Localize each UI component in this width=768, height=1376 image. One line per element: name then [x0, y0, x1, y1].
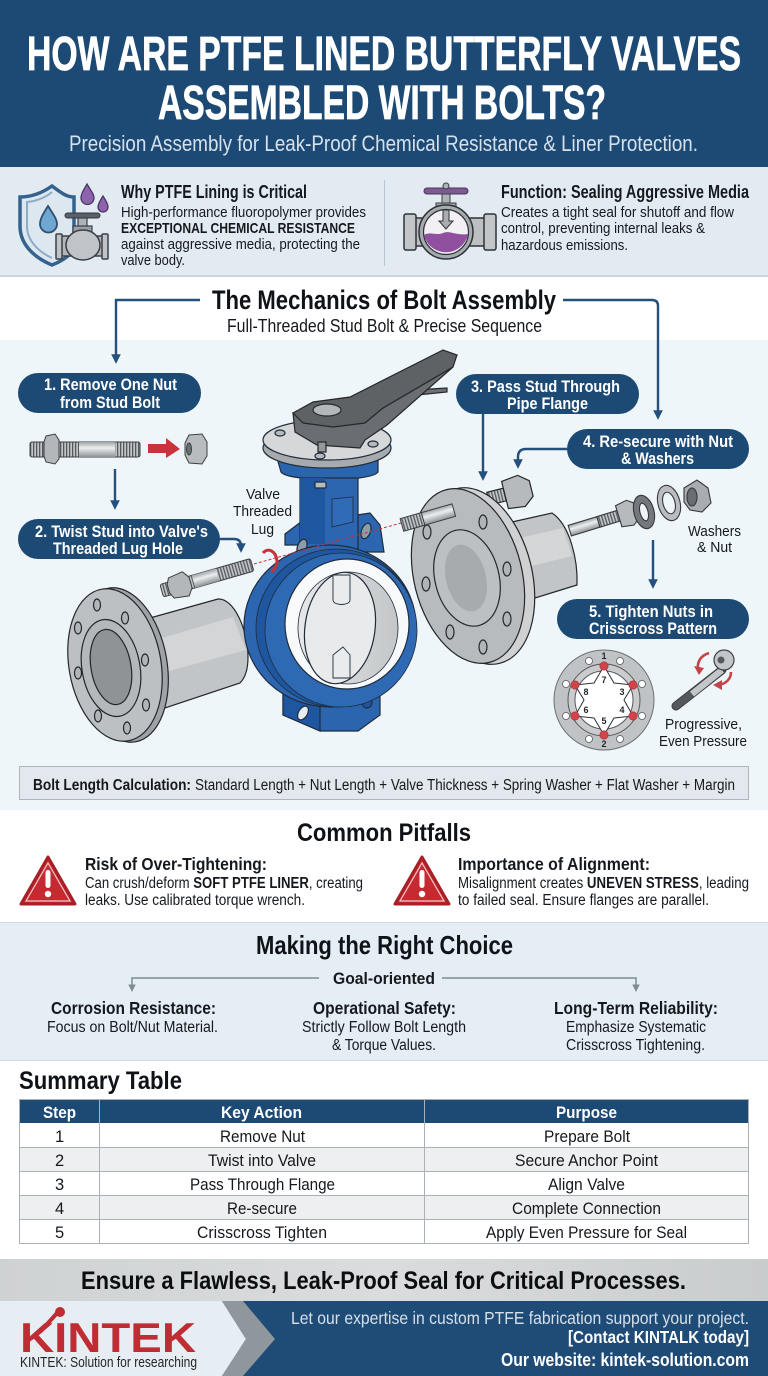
- step 1 pill: 1. Remove One Nut: [44, 376, 177, 394]
- table row 3: [55, 1176, 625, 1194]
- label: valve threaded lug: Lug: [251, 521, 274, 538]
- step 3 pill: 3. Pass Stud Through: [471, 378, 620, 396]
- arrow: step 4 to bolt: [518, 449, 567, 465]
- diagram: crisscross tightening pattern: 3: [619, 687, 625, 697]
- icon: warning right: [395, 857, 449, 904]
- arrow: step 3 to flange: [482, 414, 484, 477]
- label: goal-oriented with arrows: [132, 969, 636, 989]
- text block: why PTFE lining is critical: High-performance fluoropolymer provides: [121, 204, 366, 221]
- table header: Key Action: [221, 1104, 302, 1122]
- heading: common pitfalls: Common Pitfalls: [297, 819, 471, 847]
- illustration: stud through flange: [400, 504, 456, 531]
- illustration: top flange: [263, 420, 391, 468]
- table row 3: Align Valve: [548, 1176, 625, 1194]
- label: valve threaded lug: Threaded: [233, 503, 292, 520]
- table row 5: 5: [55, 1224, 64, 1242]
- arrow: step 1 to step 2: [114, 469, 116, 506]
- column: corrosion resistance: Corrosion Resistance:: [51, 998, 216, 1018]
- text block: function sealing aggressive media: [501, 182, 750, 254]
- illustration: butterfly valve: [244, 350, 457, 731]
- illustration: bolt behind flange: [485, 473, 535, 515]
- text block: why PTFE lining is critical: against aggressive media, protecting the: [121, 236, 360, 253]
- label: valve threaded lug: [233, 486, 292, 538]
- illustration: stud bolt and nut removed: [30, 434, 207, 464]
- panel: summary table: [0, 1061, 768, 1259]
- table row 1: 1: [55, 1128, 64, 1146]
- arrow: heading to step 1: [116, 300, 200, 360]
- step 2 pill: [18, 519, 220, 559]
- column: operational safety: [302, 998, 466, 1054]
- callout: bolt length calculation: [20, 766, 748, 800]
- text block: why PTFE lining is critical: [121, 182, 366, 269]
- column: operational safety: & Torque Values.: [332, 1037, 436, 1054]
- logo: KINTEK: [20, 1307, 197, 1371]
- label: progressive even pressure: [659, 716, 747, 750]
- diagram: crisscross tightening pattern: 8: [583, 687, 589, 697]
- table row 5: Apply Even Pressure for Seal: [486, 1224, 687, 1242]
- table header: [19, 1099, 749, 1123]
- column: corrosion resistance: Focus on Bolt/Nut Material.: [47, 1019, 218, 1036]
- label: progressive even pressure: Progressive,: [665, 716, 742, 733]
- text block: function sealing aggressive media: Creates a tight seal for shutoff and flow: [501, 204, 734, 221]
- diagram: crisscross tightening pattern: 4: [619, 705, 625, 715]
- diagram: crisscross tightening pattern: 1: [601, 651, 607, 661]
- step 2 pill: Threaded Lug Hole: [53, 540, 183, 558]
- step 4 pill: & Washers: [621, 450, 694, 468]
- label: valve threaded lug: Valve: [246, 486, 280, 503]
- icon: shield, valve and drops: [20, 184, 108, 265]
- icon: warning left: [21, 857, 75, 904]
- step 5 pill: [557, 599, 749, 639]
- text block: risk of over-tightening: Can crush/deform SOFT PTFE LINER, creating: [85, 875, 363, 892]
- column: operational safety: Operational Safety:: [313, 998, 456, 1018]
- table row 5: Crisscross Tighten: [197, 1224, 327, 1242]
- text block: risk of over-tightening: [85, 854, 363, 909]
- table row 1: Prepare Bolt: [544, 1128, 630, 1146]
- text block: why PTFE lining is critical: Why PTFE Lining is Critical: [121, 182, 307, 202]
- illustration: valve disc: [298, 568, 398, 688]
- heading: summary table: Summary Table: [19, 1067, 182, 1095]
- table header: Purpose: [556, 1104, 617, 1122]
- panel: introduction: [0, 167, 768, 277]
- table row 3: Pass Through Flange: [190, 1176, 335, 1194]
- arrow: washers to step 5: [652, 540, 654, 585]
- text block: function sealing aggressive media: hazardous emissions.: [501, 237, 628, 254]
- icon: sealing valve: [404, 183, 496, 259]
- step 4 pill: 4. Re-secure with Nut: [583, 433, 733, 451]
- closing banner: [0, 1259, 768, 1301]
- label: progressive even pressure: Even Pressure: [659, 733, 747, 750]
- illustration: PTFE liner: [285, 559, 409, 689]
- text block: why PTFE lining is critical: valve body.: [121, 252, 185, 269]
- diagram: crisscross tightening pattern: 6: [583, 705, 589, 715]
- table: [19, 1099, 749, 1244]
- illustration: stud twisting into lug: [158, 553, 256, 603]
- header banner: [0, 0, 768, 167]
- table row 5: [55, 1224, 687, 1242]
- column: long-term reliability: Emphasize Systematic: [566, 1019, 706, 1036]
- logo: KINTEK: KINTEK: [20, 1314, 196, 1361]
- table row 2: [55, 1152, 658, 1170]
- illustration: red insertion guide: [254, 523, 401, 572]
- label: washers and nut: Washers: [688, 523, 741, 540]
- illustration: right pipe with flange: [394, 473, 577, 676]
- step 3 pill: [456, 374, 639, 414]
- arrow: step 2 to lug: [218, 539, 241, 549]
- column: corrosion resistance: [47, 998, 218, 1036]
- step 1 pill: from Stud Bolt: [60, 394, 160, 412]
- heading: right choice: Making the Right Choice: [256, 930, 513, 960]
- icon: ratchet wrench: [676, 650, 734, 706]
- label: washers and nut: [688, 523, 741, 556]
- arrow: heading to step 4: [563, 300, 658, 416]
- table row 4: 4: [55, 1200, 64, 1218]
- text block: function sealing aggressive media: control, preventing internal leaks &: [501, 220, 705, 237]
- column: long-term reliability: [554, 998, 718, 1054]
- title: [27, 28, 741, 130]
- table row 1: [55, 1128, 630, 1146]
- label: goal-oriented with arrows: Goal-oriented: [333, 969, 435, 988]
- closing banner: Ensure a Flawless, Leak-Proof Seal for Critical Processes.: [81, 1267, 686, 1295]
- illustration: handle: [293, 350, 457, 452]
- panel: common pitfalls: [0, 810, 768, 922]
- diagram: crisscross tightening pattern: 7: [601, 675, 607, 685]
- table row 2: Secure Anchor Point: [515, 1152, 658, 1170]
- table row 2: 2: [55, 1152, 64, 1170]
- contact text: [291, 1308, 749, 1370]
- table row 4: Re-secure: [227, 1200, 297, 1218]
- column: long-term reliability: Long-Term Reliability:: [554, 998, 718, 1018]
- text block: importance of alignment: Misalignment creates UNEVEN STRESS, leading: [458, 875, 749, 892]
- step 5 pill: Crisscross Pattern: [589, 620, 717, 638]
- illustration: stud, washers and nut: [566, 480, 711, 544]
- table row 2: Twist into Valve: [208, 1152, 316, 1170]
- text block: importance of alignment: Importance of Alignment:: [458, 854, 650, 874]
- label: washers and nut: & Nut: [697, 539, 733, 556]
- table header: Step: [43, 1104, 76, 1122]
- panel: making the right choice: [0, 922, 768, 1061]
- text block: importance of alignment: to failed seal. Ensure flanges are parallel.: [458, 892, 709, 909]
- text block: importance of alignment: [458, 854, 749, 909]
- column: long-term reliability: Crisscross Tightening.: [566, 1037, 705, 1054]
- footer: [0, 1301, 768, 1376]
- panel: mechanics of bolt assembly: [0, 277, 768, 810]
- step 2 pill: 2. Twist Stud into Valve's: [35, 523, 208, 541]
- table row 4: [55, 1200, 661, 1218]
- step 5 pill: 5. Tighten Nuts in: [589, 603, 713, 621]
- heading: mechanics: The Mechanics of Bolt Assembly: [212, 285, 556, 315]
- step 1 pill: [18, 373, 201, 413]
- table row 4: Complete Connection: [512, 1200, 661, 1218]
- callout: bolt length calculation: Bolt Length Calculation:: [33, 777, 191, 794]
- text block: why PTFE lining is critical: EXCEPTIONAL CHEMICAL RESISTANCE: [121, 220, 355, 237]
- diagram: crisscross tightening pattern: 5: [601, 716, 607, 726]
- step 4 pill: [567, 429, 749, 469]
- illustration: valve neck and body: [244, 458, 417, 731]
- diagram: crisscross tightening pattern: [554, 650, 654, 750]
- table row 3: 3: [55, 1176, 64, 1194]
- table row 1: Remove Nut: [220, 1128, 305, 1146]
- logo: KINTEK: KINTEK: Solution for researching: [20, 1354, 197, 1371]
- diagram: crisscross tightening pattern: 2: [601, 739, 607, 749]
- subheading: mechanics: Full-Threaded Stud Bolt & Precise Sequence: [227, 316, 542, 336]
- illustration: left pipe with flange: [56, 580, 248, 750]
- text block: risk of over-tightening: leaks. Use calibrated torque wrench.: [85, 892, 305, 909]
- column: operational safety: Strictly Follow Bolt Length: [302, 1019, 466, 1036]
- step 3 pill: Pipe Flange: [507, 395, 588, 413]
- text block: risk of over-tightening: Risk of Over-Tightening:: [85, 854, 267, 874]
